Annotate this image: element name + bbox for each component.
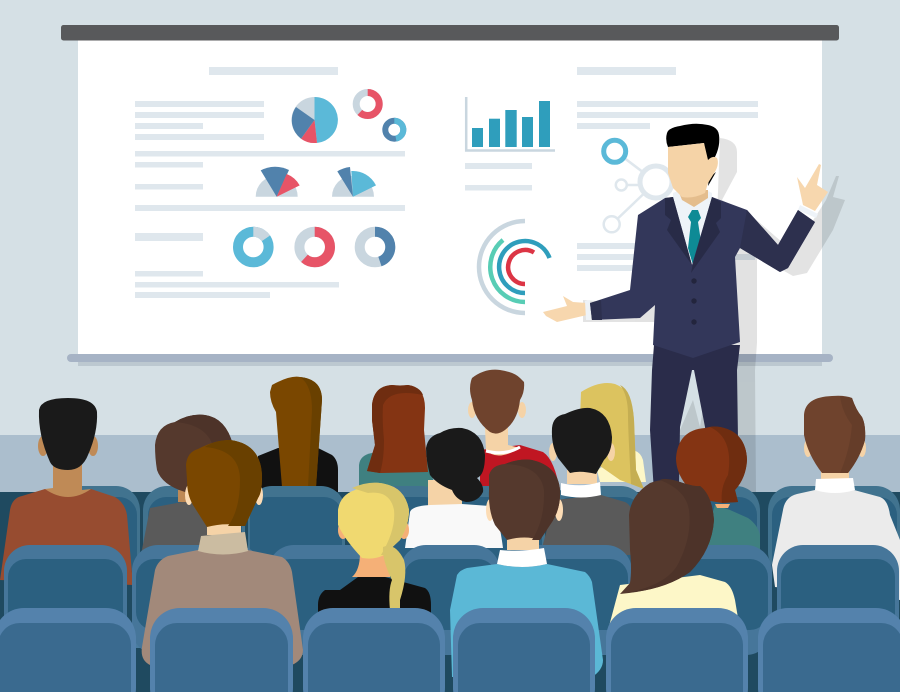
person: blonde hair cream shirt — [580, 383, 646, 489]
text lines: right column — [465, 67, 758, 271]
person: blonde braid black top — [318, 483, 431, 625]
cuffs — [585, 205, 818, 320]
gauge chart: blue and light blue — [332, 167, 376, 197]
person: red hair teal shirt — [359, 385, 437, 492]
jacket buttons — [691, 278, 697, 325]
trousers — [650, 345, 740, 492]
presenter — [543, 124, 828, 492]
person: ponytail cream top — [608, 479, 740, 630]
lapels — [665, 197, 721, 273]
right hand — [797, 164, 828, 211]
person: red hair teal top — [676, 426, 760, 555]
concentric arc chart — [479, 221, 550, 313]
neck and shirt — [673, 190, 712, 263]
donut: blue — [360, 232, 390, 262]
donut: light blue — [238, 232, 269, 262]
donut: blue small — [385, 121, 403, 139]
presenter shadow — [583, 138, 845, 492]
audience middle row — [0, 396, 900, 600]
donut: red — [299, 232, 330, 262]
seat row 3 — [0, 608, 900, 692]
person: red shirt man — [468, 370, 560, 492]
hair — [666, 124, 719, 165]
person: white shirt man — [772, 396, 900, 600]
pie chart — [292, 97, 338, 143]
jacket sleeves shade — [590, 210, 815, 320]
person: blue shirt man — [450, 460, 603, 677]
audience back row — [258, 370, 646, 492]
jacket — [590, 197, 815, 358]
text lines: left column — [135, 67, 405, 298]
seat row 2 — [0, 545, 900, 655]
seat row 1 — [47, 486, 900, 576]
face — [668, 143, 718, 198]
tie — [688, 210, 702, 265]
network diagram — [604, 140, 672, 232]
person: black hair grey sweater — [540, 408, 632, 555]
person: grey sweater brown hair — [140, 415, 247, 560]
projection screen — [61, 25, 839, 366]
bar chart — [466, 97, 555, 150]
person: long brown hair — [258, 377, 338, 492]
gauge chart: blue and red — [256, 167, 300, 197]
donut: red small — [356, 92, 379, 116]
audience front row — [142, 440, 740, 677]
left hand — [543, 296, 587, 322]
person: black hair rust sweater — [0, 398, 133, 585]
person: tan coat man — [142, 440, 303, 665]
person: bun hair white shirt — [405, 428, 503, 548]
